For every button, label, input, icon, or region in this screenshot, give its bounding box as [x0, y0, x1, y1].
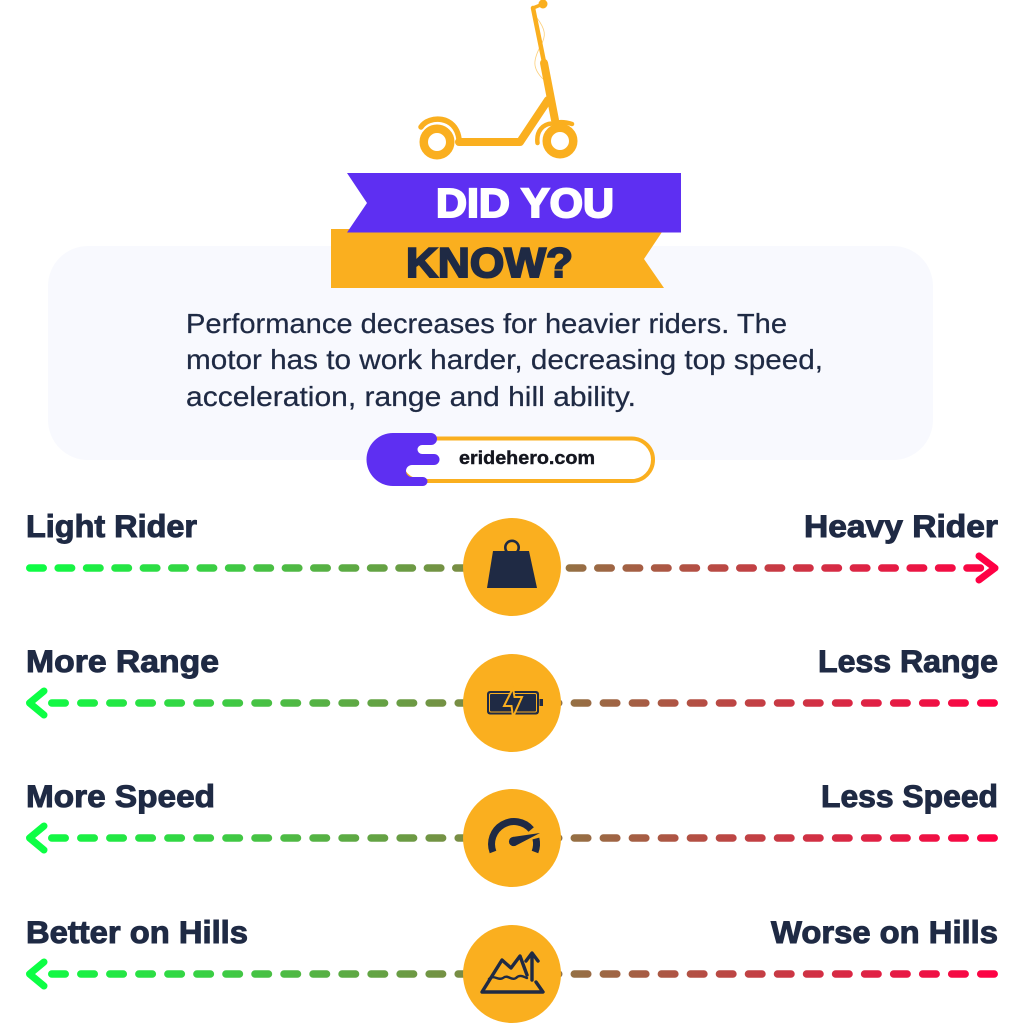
text block: did you know body: Performance decreases for heavier riders. The	[186, 308, 787, 339]
row: speed	[26, 778, 998, 887]
icon: hill climb	[482, 953, 543, 992]
text block: did you know body: motor has to work harder, decreasing top speed,	[186, 344, 823, 375]
row: rider weight	[26, 508, 998, 616]
panel: did you know background	[48, 246, 933, 460]
row: range: Less Range	[818, 643, 998, 679]
icon: battery	[487, 688, 543, 717]
icon: electric scooter	[421, 0, 573, 155]
text block: did you know body: acceleration, range and hill ability.	[186, 381, 636, 412]
text block: did you know body	[186, 308, 823, 412]
row: rider weight: Light Rider	[26, 508, 197, 544]
icon: weight	[487, 541, 537, 588]
website badge: eridehero.com	[459, 447, 595, 468]
row: rider weight: Heavy Rider	[804, 508, 998, 544]
row: range: More Range	[26, 643, 219, 679]
row: speed: Less Speed	[821, 778, 998, 814]
banner: know	[331, 229, 664, 288]
website badge	[366, 433, 653, 486]
banner: know: KNOW?	[406, 239, 573, 286]
row: speed: More Speed	[26, 778, 215, 814]
row: hills	[26, 914, 998, 1023]
banner: did you	[347, 173, 681, 232]
row: range	[26, 643, 998, 752]
row: hills: Better on Hills	[26, 914, 248, 950]
row: hills: Worse on Hills	[771, 914, 998, 950]
banner: did you: DID YOU	[436, 180, 614, 226]
icon: speedometer	[492, 822, 540, 852]
